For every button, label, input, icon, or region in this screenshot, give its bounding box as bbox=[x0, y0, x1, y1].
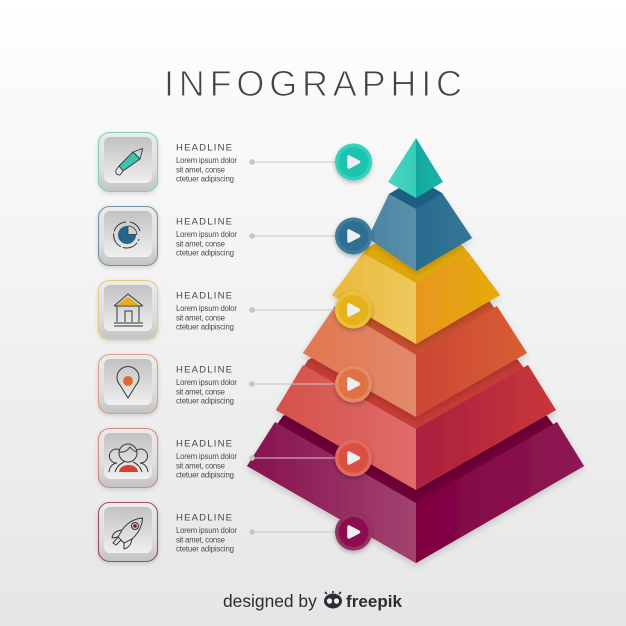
text: headline 5: sit amet, conse bbox=[176, 462, 225, 470]
text: headline 4: ctetuer adipiscing bbox=[176, 396, 234, 406]
footer credit bbox=[223, 591, 403, 611]
text: headline 6: HEADLINE bbox=[176, 512, 232, 524]
play button: blue bbox=[335, 218, 372, 254]
text: headline 3: ctetuer adipiscing bbox=[176, 322, 234, 332]
text: headline 3: Lorem ipsum dolor bbox=[176, 304, 237, 313]
text: headline 6 bbox=[176, 512, 237, 554]
icon card: rocket bbox=[98, 502, 158, 562]
text: headline 1 bbox=[176, 142, 237, 184]
play button: red bbox=[335, 440, 372, 476]
text: headline 3 bbox=[176, 290, 237, 332]
play button: orange bbox=[335, 366, 372, 402]
text: headline 3: sit amet, conse bbox=[176, 314, 225, 322]
pyramid layer: magenta bbox=[247, 340, 584, 563]
text: headline 4: sit amet, conse bbox=[176, 388, 225, 396]
text: headline 1: Lorem ipsum dolor bbox=[176, 156, 237, 165]
pyramid tip: teal bbox=[388, 138, 443, 198]
icon card: chart bbox=[98, 206, 158, 266]
icon: home bbox=[114, 294, 143, 326]
icon card: home bbox=[98, 280, 158, 340]
pyramid layer: yellow bbox=[332, 225, 500, 344]
text: headline 1: HEADLINE bbox=[176, 142, 232, 154]
icon: freepik logo bbox=[324, 591, 342, 608]
icon: pie chart bbox=[114, 222, 140, 248]
icon card: location bbox=[98, 354, 158, 414]
text: headline 2: HEADLINE bbox=[176, 216, 232, 228]
pyramid layer: orange bbox=[303, 260, 527, 417]
text: headline 6: sit amet, conse bbox=[176, 536, 225, 544]
pyramid layer: red bbox=[276, 300, 556, 490]
text: headline 1: ctetuer adipiscing bbox=[176, 174, 234, 184]
text: headline 2: Lorem ipsum dolor bbox=[176, 230, 237, 239]
text: headline 4: Lorem ipsum dolor bbox=[176, 378, 237, 387]
text: headline 2 bbox=[176, 216, 237, 258]
play button: teal bbox=[335, 144, 372, 180]
icon: pencil bbox=[116, 148, 143, 175]
text: headline 5: HEADLINE bbox=[176, 438, 232, 450]
text: headline 4 bbox=[176, 364, 237, 406]
footer credit: designed by bbox=[223, 591, 317, 611]
text: headline 2: ctetuer adipiscing bbox=[176, 248, 234, 258]
text: headline 5 bbox=[176, 438, 237, 480]
text: headline 3: HEADLINE bbox=[176, 290, 232, 302]
play button: yellow bbox=[335, 292, 372, 328]
pyramid bbox=[247, 138, 584, 563]
text: headline 5: ctetuer adipiscing bbox=[176, 470, 234, 480]
play button: magenta bbox=[335, 514, 372, 550]
icon: rocket bbox=[112, 518, 142, 549]
icon card: pencil bbox=[98, 132, 158, 192]
text: headline 6: ctetuer adipiscing bbox=[176, 544, 234, 554]
pyramid layer: blue bbox=[368, 178, 472, 271]
text: headline 2: sit amet, conse bbox=[176, 240, 225, 248]
text: headline 5: Lorem ipsum dolor bbox=[176, 452, 237, 461]
icon: people bbox=[109, 444, 148, 472]
connector lines bbox=[249, 159, 336, 535]
text: headline 6: Lorem ipsum dolor bbox=[176, 526, 237, 535]
title: INFOGRAPHIC bbox=[164, 63, 462, 104]
footer credit: freepik bbox=[346, 592, 403, 611]
icon card: people bbox=[98, 428, 158, 488]
text: headline 4: HEADLINE bbox=[176, 364, 232, 376]
icon: location pin bbox=[117, 366, 139, 398]
text: headline 1: sit amet, conse bbox=[176, 166, 225, 174]
